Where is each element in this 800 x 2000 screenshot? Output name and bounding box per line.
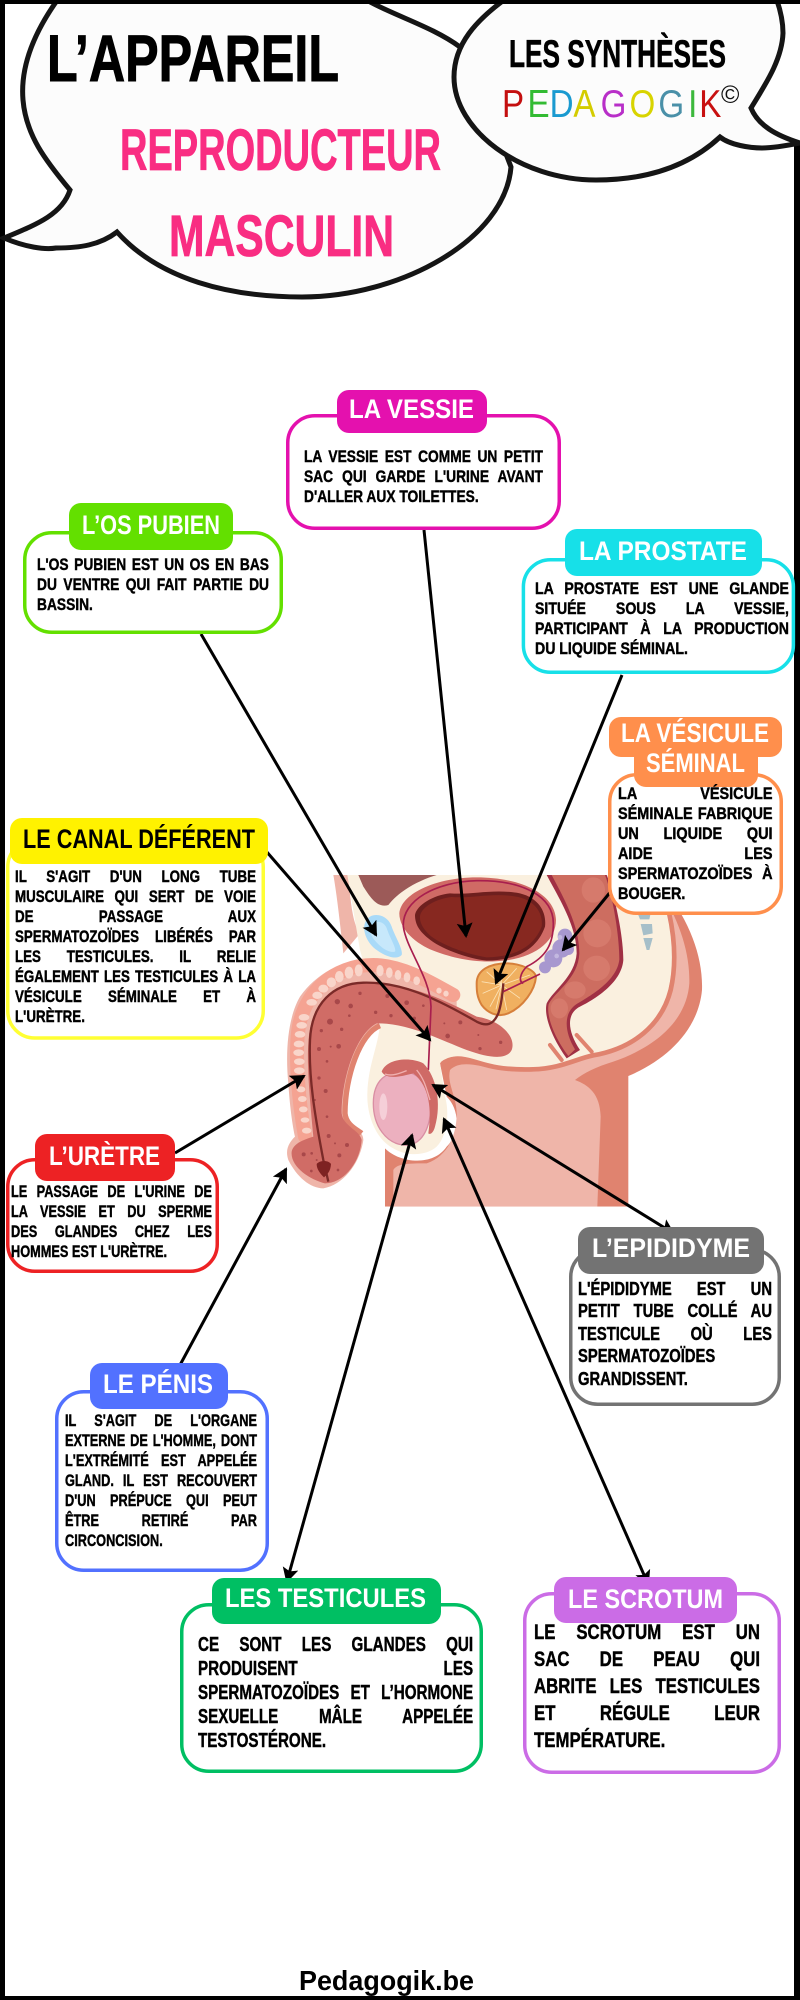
- skin: [385, 915, 702, 1207]
- text: L'OS PUBIEN EST UN OS EN BAS: [37, 555, 269, 574]
- panel: la vesicule seminal: [609, 717, 782, 913]
- panel: le canal deferent: [8, 818, 268, 1038]
- text: [618, 784, 773, 904]
- text: D'UN PRÉPUCE QUI PEUT: [65, 1491, 257, 1510]
- text: LA VESSIE ET DU SPERME: [11, 1202, 212, 1221]
- top edge: [0, 0, 800, 4]
- text: TESTICULE OÙ LES: [578, 1324, 772, 1344]
- text: CE SONT LES GLANDES QUI: [198, 1634, 473, 1656]
- series name: G: [658, 81, 684, 126]
- box: [523, 560, 793, 672]
- upper organ: [358, 875, 437, 906]
- text: GRANDISSENT.: [578, 1369, 688, 1389]
- heading: L’OS PUBIEN: [82, 510, 220, 540]
- arrow: os pubien: [201, 634, 376, 935]
- pubic bone: [364, 915, 402, 957]
- inner salmon ring: [440, 915, 676, 1072]
- series name: I: [688, 81, 697, 126]
- text: [534, 1619, 760, 1754]
- heading: [337, 390, 487, 433]
- series name: [502, 32, 740, 126]
- arrow: vessie: [424, 530, 466, 936]
- text: HOMMES EST L'URÈTRE.: [11, 1242, 167, 1261]
- series name: A: [573, 81, 596, 126]
- heading: [578, 1227, 764, 1274]
- panel: les testicules: [182, 1578, 481, 1771]
- heading: [609, 717, 782, 787]
- text: CIRCONCISION.: [65, 1531, 163, 1550]
- text: UN LIQUIDE QUI: [618, 824, 773, 843]
- text: IL S'AGIT D'UN LONG TUBE: [15, 867, 256, 886]
- text: LES TESTICULES. IL RELIE: [15, 947, 256, 966]
- glans tip: [317, 1161, 331, 1177]
- text: TESTOSTÉRONE.: [198, 1730, 326, 1752]
- heading: [565, 529, 762, 576]
- text: DE PASSAGE AUX: [15, 907, 256, 926]
- text: L'EXTRÉMITÉ EST APPELÉE: [65, 1451, 257, 1470]
- text: SITUÉE SOUS LA VESSIE,: [535, 599, 789, 618]
- series name: E: [528, 81, 550, 126]
- text: ÉGALEMENT LES TESTICULES À LA: [15, 967, 256, 986]
- thigh and inner band: [393, 915, 690, 1206]
- text: SPERMATOZOÏDES: [578, 1346, 715, 1366]
- pelvic band left: [333, 875, 360, 953]
- heading: L’URÈTRE: [49, 1140, 160, 1171]
- text: ÊTRE RETIRÉ PAR: [65, 1511, 257, 1530]
- series name: G: [601, 81, 626, 126]
- box: [8, 840, 263, 1038]
- box: [610, 775, 781, 913]
- penis inner edge: [345, 1026, 380, 1133]
- text: ABRITE LES TESTICULES: [534, 1675, 760, 1698]
- text: [198, 1633, 473, 1753]
- text: PRODUISENT LES: [198, 1658, 473, 1680]
- text: LA VESSIE EST COMME UN PETIT: [304, 447, 543, 466]
- heading: LES TESTICULES: [225, 1583, 426, 1613]
- heading: [10, 818, 268, 864]
- text: EXTERNE DE L'HOMME, DONT: [65, 1431, 257, 1450]
- footer: source: Pedagogik.be: [299, 1965, 474, 1996]
- text: SPERMATOZOÏDES ET L’HORMONE: [198, 1682, 473, 1704]
- box: [57, 1392, 267, 1570]
- text: [11, 1182, 212, 1262]
- heading: LE CANAL DÉFÉRENT: [23, 823, 255, 854]
- text: SAC DE PEAU QUI: [534, 1648, 760, 1671]
- title: MASCULIN: [169, 204, 394, 269]
- heading: [69, 503, 233, 550]
- heading: SÉMINAL: [646, 747, 745, 778]
- prostate: [477, 963, 536, 1015]
- text: MUSCULAIRE QUI SERT DE VOIE: [15, 887, 256, 906]
- text: PARTICIPANT À LA PRODUCTION: [535, 619, 789, 638]
- series name: O: [630, 81, 655, 126]
- title: REPRODUCTEUR: [120, 118, 441, 183]
- speech bubble: series name: [454, 0, 800, 180]
- speech bubble: title: [4, 0, 511, 297]
- anatomical illustration: [287, 875, 702, 1207]
- heading: LA PROSTATE: [579, 536, 747, 566]
- coccyx: [638, 913, 653, 950]
- box: [525, 1594, 779, 1772]
- corpus: [292, 983, 513, 1183]
- text: BASSIN.: [37, 595, 93, 614]
- panel: le scrotum: [525, 1577, 779, 1772]
- text: LA VÉSICULE: [618, 784, 773, 803]
- heading: [554, 1577, 737, 1623]
- rectum: [546, 875, 623, 1060]
- box: [571, 1250, 779, 1404]
- series name: ©: [721, 81, 740, 109]
- panel: la vessie: [288, 390, 559, 528]
- text: L'ÉPIDIDYME EST UN: [578, 1279, 772, 1299]
- text: [15, 867, 256, 1027]
- text: DES GLANDES CHEZ LES: [11, 1222, 212, 1241]
- epididymis: [382, 1060, 438, 1134]
- title: L’APPAREIL: [47, 21, 339, 95]
- text: [65, 1411, 257, 1551]
- series name: P: [502, 81, 524, 126]
- arrow: testicules: [287, 1135, 412, 1581]
- text: AIDE LES: [618, 844, 773, 863]
- text: PETIT TUBE COLLÉ AU: [578, 1301, 772, 1321]
- box: [182, 1605, 481, 1771]
- heading: L’EPIDIDYME: [592, 1233, 750, 1263]
- text: DU VENTRE QUI FAIT PARTIE DU: [37, 575, 269, 594]
- text: TEMPÉRATURE.: [534, 1729, 665, 1752]
- top right mask: [760, 4, 800, 143]
- vas deferens: [403, 881, 553, 1070]
- text: [304, 447, 543, 507]
- text: SAC QUI GARDE L'URINE AVANT: [304, 467, 543, 486]
- box: [8, 1160, 217, 1271]
- text: SPERMATOZOÏDES LIBÉRÉS PAR: [15, 927, 256, 946]
- series name: K: [699, 81, 721, 126]
- text: BOUGER.: [618, 884, 685, 903]
- box: [288, 416, 559, 528]
- arrow: penis: [180, 1169, 286, 1365]
- text: ET RÉGULE LEUR: [534, 1702, 760, 1725]
- arrow: epididyme: [433, 1085, 673, 1233]
- text: L'URÈTRE.: [15, 1007, 85, 1026]
- heading: LA VÉSICULE: [621, 717, 769, 748]
- text: LE SCROTUM EST UN: [534, 1621, 760, 1644]
- series name: D: [550, 81, 574, 126]
- text: SÉMINALE FABRIQUE: [618, 804, 773, 823]
- panel: l'uretre: [8, 1134, 217, 1271]
- erectile cells: [293, 964, 449, 1134]
- heading: [35, 1134, 175, 1181]
- corpus spots: [302, 992, 502, 1172]
- box: [25, 533, 281, 632]
- text: D'ALLER AUX TOILETTES.: [304, 487, 479, 506]
- heading: [212, 1578, 441, 1624]
- panel: l'os pubien: [25, 503, 281, 632]
- text: LE PASSAGE DE L'URINE DE: [11, 1182, 212, 1201]
- seminal vesicle: [539, 929, 574, 973]
- erectile band: [297, 965, 453, 1137]
- title: [47, 21, 441, 269]
- text: SPERMATOZOÏDES À: [618, 864, 773, 883]
- text: IL S'AGIT DE L'ORGANE: [65, 1411, 257, 1430]
- panel: le penis: [57, 1363, 267, 1570]
- interior cream: [347, 875, 672, 1154]
- heading: LA VESSIE: [349, 394, 474, 424]
- text: GLAND. IL EST RECOUVERT: [65, 1471, 257, 1490]
- arrow: prostate: [496, 675, 622, 983]
- text: DU LIQUIDE SÉMINAL.: [535, 639, 688, 658]
- urethra: [310, 983, 503, 1182]
- text: VÉSICULE SÉMINALE ET À: [15, 987, 256, 1006]
- heading: LE PÉNIS: [103, 1368, 213, 1399]
- panel: la prostate: [523, 529, 793, 672]
- text: SEXUELLE MÂLE APPELÉE: [198, 1706, 473, 1728]
- text: [535, 579, 789, 659]
- arrow: scrotum: [444, 1119, 648, 1584]
- arrow: canal deferent: [266, 851, 430, 1040]
- text: [37, 555, 269, 615]
- arrow: uretre: [175, 1076, 304, 1153]
- penis skin: [287, 959, 457, 1188]
- text: LA PROSTATE EST UNE GLANDE: [535, 579, 789, 598]
- bladder: [399, 877, 556, 962]
- heading: LE SCROTUM: [568, 1584, 723, 1614]
- panel: l'epididyme: [571, 1227, 779, 1404]
- text: [578, 1278, 772, 1393]
- testis: [373, 1071, 431, 1145]
- arrow: vesicule: [563, 890, 612, 950]
- heading: [90, 1363, 228, 1409]
